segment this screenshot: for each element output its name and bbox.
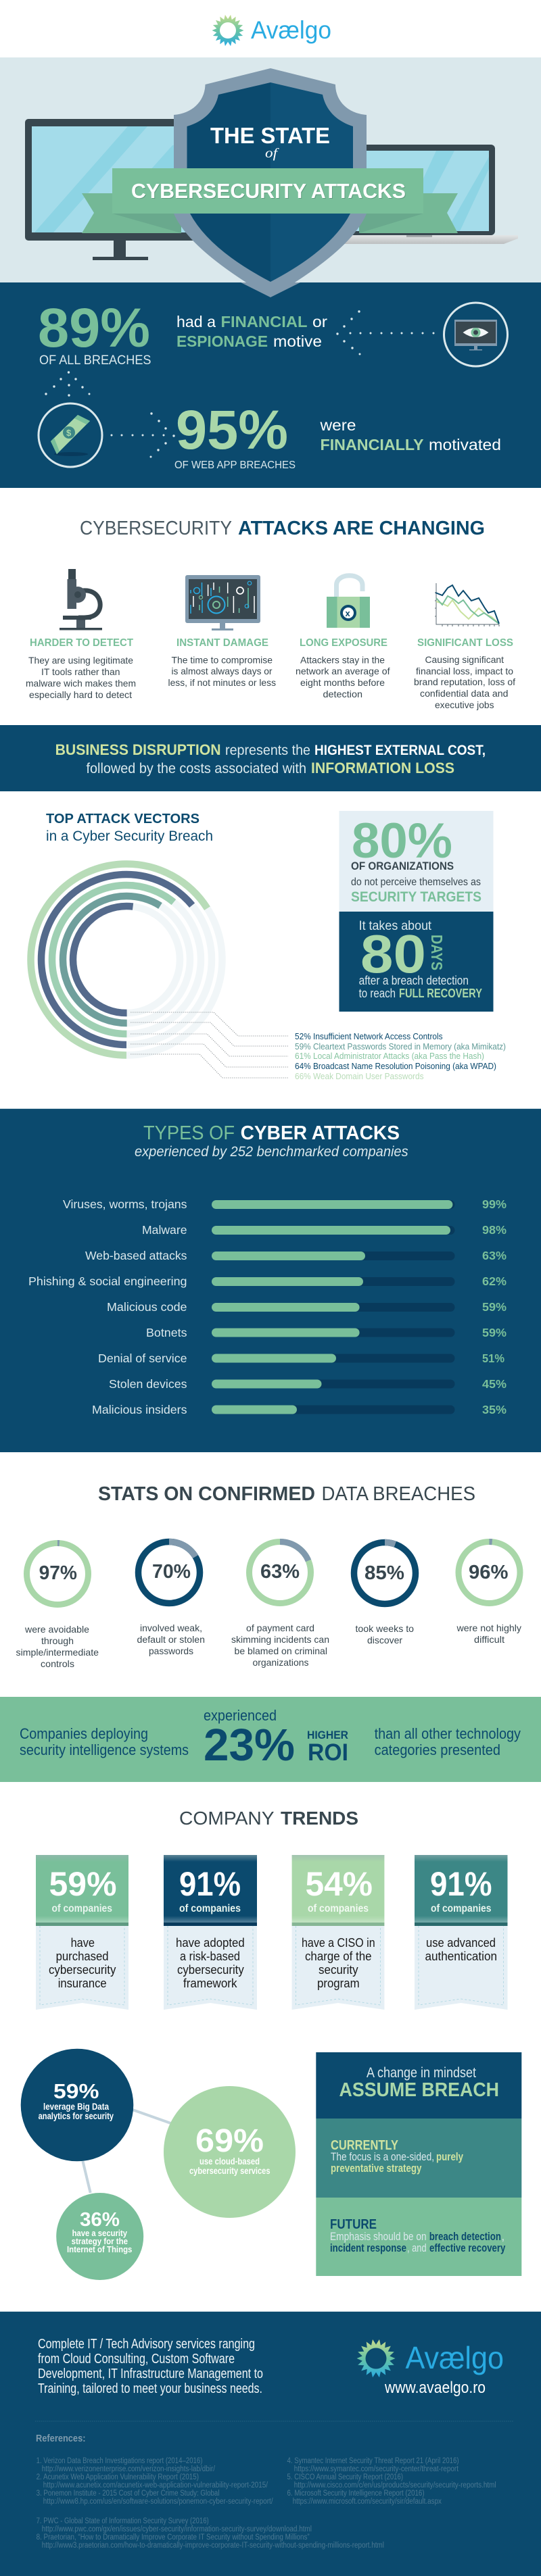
references list: https://www.microsoft.com/security/sir/default.aspx (293, 2498, 442, 2506)
text: financially motivated: motivated (429, 436, 501, 453)
legend: attack vectors: 64% Broadcast Name Resolution Poisoning (aka WPAD) (295, 1061, 496, 1071)
bar chart: attack types: Botnets (146, 1326, 187, 1339)
stat: 85 percent donut: 85% (364, 1562, 404, 1584)
ribbon: 91 percent framework: 91% (179, 1865, 241, 1903)
text: description: eight months before (300, 677, 385, 688)
ribbon: 91 percent framework: have adopted (176, 1936, 245, 1950)
stat: 96 percent donut: were not highly (456, 1623, 521, 1633)
text: description: financial loss, impact to (416, 666, 513, 676)
ribbon: 59 percent: cybersecurity (49, 1963, 116, 1977)
column: harder to detect: HARDER TO DETECT (30, 637, 133, 649)
bubble: 36 percent internet of things: Internet of Things (67, 2244, 132, 2254)
heading: company trends: COMPANY (179, 1808, 275, 1829)
references list: http://www3.praetorian.com/how-to-dramatically-improve-corporate-IT-security-without-spending-millions-report.html (42, 2542, 384, 2550)
references list: 4. Symantec Internet Security Threat Report 21 (April 2016) (287, 2457, 459, 2465)
panel: currently (316, 2119, 521, 2198)
stat: 97 percent donut: simple/intermediate (16, 1647, 99, 1658)
panel: 80 days recovery: DAYS (428, 935, 446, 970)
text: description: The time to compromise (172, 654, 273, 665)
stat: 63 percent donut: 63% (260, 1561, 300, 1583)
panel: hero (0, 57, 541, 297)
legend: attack vectors (295, 1031, 506, 1081)
panel: assume breach: A change in mindset (367, 2065, 476, 2081)
leader lines (131, 1012, 288, 1078)
banner: business disruption: BUSINESS DISRUPTION (55, 741, 221, 758)
stat: 63 percent donut (231, 1542, 329, 1668)
panel: assume breach: ASSUME BREACH (339, 2079, 499, 2101)
icon: money bill: $ (66, 428, 72, 438)
icon: monitor with data (185, 575, 260, 630)
column: significant loss: SIGNIFICANT LOSS (417, 637, 513, 649)
stat: 95 percent: 95% (176, 399, 288, 461)
panel: future: , and (407, 2242, 427, 2254)
panel: 80 days recovery: to reach (359, 987, 396, 1000)
ribbon: 91 percent framework: cybersecurity (177, 1963, 244, 1977)
bubble: 36 percent internet of things: have a security (72, 2228, 128, 2238)
icon: falling line chart (435, 583, 499, 626)
text: financial or espionage motive: had a (177, 313, 216, 330)
text: services blurb: Training, tailored to meet your business needs. (38, 2381, 262, 2396)
title: the state of (210, 123, 330, 161)
references list: http://www.verizonenterprise.com/verizon-insights-lab/dbir/ (42, 2465, 216, 2473)
references heading: References: (36, 2433, 85, 2444)
legend: attack vectors: 66% Weak Domain User Passwords (295, 1071, 424, 1081)
bubble: 69 percent cloud: use cloud-based (199, 2156, 260, 2166)
banner: 23 percent higher ROI: HIGHER (307, 1729, 348, 1741)
legend: attack vectors: 61% Local Administrator Attacks (aka Pass the Hash) (295, 1051, 484, 1061)
references list: 3. Ponemon Institute - 2015 Cost of Cyber Crime Study: Global (37, 2490, 219, 2498)
banner: 23 percent higher ROI: security intelligence systems (20, 1741, 189, 1758)
header logo (212, 15, 331, 46)
panel: assume breach (316, 2052, 521, 2276)
heading: types of cyber attacks (135, 1122, 408, 1160)
banner: business disruption: represents the (225, 743, 310, 758)
title: the state of: THE STATE (210, 123, 330, 148)
bubble: 69 percent cloud: cybersecurity services (189, 2165, 270, 2176)
icon: laptop (325, 145, 518, 244)
footer (0, 2311, 541, 2576)
stat: 70 percent donut: involved weak, (140, 1623, 202, 1633)
banner: 23 percent higher ROI: 23% (204, 1720, 295, 1770)
heading: top attack vectors: in a Cyber Security Breach (46, 828, 213, 844)
references list: 8. Praetorian, “How to Dramatically Improve Corporate IT Security without Spending Millions” (37, 2533, 310, 2542)
text: financially motivated: were (319, 416, 356, 434)
bar chart: attack types: Denial of service (98, 1352, 187, 1365)
panel: 80 days recovery: 80 (360, 924, 426, 984)
references list: 1. Verizon Data Breach Investigations report (2014–2016) (37, 2457, 203, 2465)
bar chart: attack types: Malware (142, 1223, 187, 1237)
ribbon: 54 percent: have a CISO in (302, 1936, 375, 1950)
panel: currently: The focus is a one-sided, (331, 2151, 434, 2163)
banner: 23 percent higher ROI: categories presented (375, 1741, 500, 1758)
column: long exposure (296, 576, 390, 699)
stat: 85 percent donut: discover (367, 1635, 402, 1645)
title ribbon: cybersecurity attacks: CYBERSECURITY ATTACKS (131, 179, 406, 203)
bar chart: attack types (28, 1197, 507, 1416)
stat: 63 percent donut: be blamed on criminal (234, 1645, 327, 1656)
stat: 70 percent donut: 70% (152, 1561, 191, 1583)
bar chart: attack types: 51% (482, 1352, 504, 1365)
panel: 80 days recovery: It takes about (359, 919, 432, 933)
ribbon: 54 percent: 54% (306, 1865, 373, 1903)
text: description: Attackers stay in the (300, 654, 385, 665)
text: financially motivated (319, 416, 501, 453)
chart: concentric attack vector rings (31, 864, 222, 1056)
bubble: 36 percent internet of things: strategy for the (72, 2236, 128, 2246)
column: harder to detect (26, 569, 136, 700)
ribbon: 54 percent: program (317, 1977, 360, 1990)
arrow: dotted to 95 percent (111, 412, 175, 458)
banner: 23 percent higher ROI: Companies deploying (20, 1725, 148, 1742)
panel: future (316, 2198, 521, 2276)
footer logo: www.avaelgo.ro (384, 2379, 486, 2397)
header logo: Avælgo (251, 16, 331, 44)
ribbon: 59 percent: insurance (58, 1977, 107, 1990)
stat: 97 percent donut: controls (41, 1658, 74, 1669)
panel: breach stats (0, 282, 541, 488)
column: instant damage: INSTANT DAMAGE (177, 637, 268, 649)
heading: top attack vectors (46, 812, 213, 844)
heading: top attack vectors: TOP ATTACK VECTORS (46, 812, 199, 826)
arrow: dotted upward to 89 percent (45, 371, 91, 397)
text: financially motivated: FINANCIALLY (321, 436, 423, 453)
panel: 80 percent of organizations: SECURITY TARGETS (351, 889, 481, 905)
references list: https://www.symantec.com/security-center/threat-report (294, 2465, 459, 2473)
panel: currently: CURRENTLY (331, 2138, 399, 2153)
heading: stats on confirmed data breaches (98, 1483, 475, 1505)
references list: 5. CISCO Annual Security Report (2016) (287, 2473, 403, 2481)
stat: 85 percent donut (354, 1542, 415, 1645)
text: description (414, 654, 515, 710)
title: the state of: of (265, 146, 279, 161)
icon: open padlock: x (345, 608, 350, 618)
panel: future: effective recovery (429, 2242, 506, 2254)
bar chart: attack types: Malicious insiders (92, 1403, 187, 1416)
heading: cybersecurity attacks are changing: CYBERSECURITY (80, 518, 232, 539)
icon: open padlock (327, 576, 370, 628)
panel: currently: preventative strategy (331, 2162, 422, 2175)
stat: 70 percent donut (137, 1542, 205, 1656)
text: description: especially hard to detect (29, 689, 132, 700)
ribbon tails (82, 193, 458, 233)
banner: 23 percent higher ROI: experienced (204, 1707, 277, 1724)
text: description: malware wich makes them (26, 678, 136, 689)
text: financial or espionage motive (177, 313, 327, 350)
stat: 96 percent donut: 96% (469, 1562, 509, 1583)
bar chart: attack types: 63% (482, 1249, 507, 1262)
icon: eye on monitor (444, 303, 507, 366)
bubble: 69 percent cloud: 69% (195, 2123, 264, 2159)
panel: 80 days recovery: FULL RECOVERY (399, 987, 482, 1000)
bar chart: attack types: 62% (482, 1274, 507, 1288)
panel: 80 percent of organizations (339, 811, 494, 912)
banner: business disruption: HIGHEST EXTERNAL COST, (314, 743, 486, 758)
references list: http://www8.hp.com/us/en/software-solutions/ponemon-cyber-security-report/ (43, 2498, 273, 2506)
panel: 80 percent of organizations: do not perceive themselves as (351, 876, 481, 888)
panel: 80 days recovery: after a breach detection (359, 974, 469, 987)
heading: company trends (179, 1808, 358, 1829)
ribbon: 91 percent authentication: of companies (431, 1903, 492, 1914)
bubble: 59 percent big data: 59% (53, 2079, 99, 2103)
ribbon: 91 percent authentication: authentication (425, 1950, 497, 1963)
references list: 6. Microsoft Security Intelligence Report (2016) (287, 2490, 425, 2498)
references list (37, 2457, 496, 2550)
bar chart: attack types: 98% (482, 1223, 507, 1237)
heading: types of cyber attacks: experienced by 252 benchmarked companies (135, 1144, 408, 1160)
ribbon: 91 percent authentication (415, 1855, 507, 2010)
text: description: network an average of (296, 666, 390, 676)
bar chart: attack types: 35% (482, 1403, 507, 1416)
stat: 70 percent donut: default or stolen (137, 1634, 205, 1645)
text: description: They are using legitimate (28, 655, 133, 666)
panel: future: incident response (330, 2242, 406, 2254)
stat: 89 percent: 89% (38, 297, 150, 359)
references list: http://www.pwc.com/gx/en/issues/cyber-security/information-security-survey/download.html (42, 2525, 312, 2533)
stat: 96 percent donut: difficult (474, 1634, 504, 1645)
bar chart: attack types: Web-based attacks (85, 1249, 187, 1262)
banner: business disruption: followed by the costs associated with (87, 761, 306, 776)
footer logo: Avælgo (406, 2340, 504, 2375)
panel: types of cyber attacks (0, 1108, 541, 1452)
icon: microscope (60, 569, 102, 630)
bubble: 69 percent cloud (164, 2086, 296, 2218)
column: significant loss (414, 583, 515, 710)
panel: future: Emphasis should be on (330, 2231, 427, 2243)
panel: 80 percent of organizations: 80% (352, 814, 452, 868)
bar chart: attack types: Malicious code (107, 1300, 187, 1314)
text: description (26, 655, 136, 700)
text: financial or espionage motive: or (312, 313, 327, 330)
stat: 70 percent donut: passwords (149, 1645, 193, 1656)
ribbon: 54 percent: of companies (308, 1903, 369, 1914)
ribbon: 91 percent framework (164, 1855, 257, 2010)
text: description: less, if not minutes or less (168, 677, 276, 688)
text: services blurb: Development, IT Infrastructure Management to (38, 2367, 263, 2381)
ribbon: 59 percent (36, 1855, 128, 2010)
column: instant damage (168, 575, 276, 688)
banner: 23 percent higher ROI: than all other technology (375, 1725, 521, 1742)
text: services blurb (38, 2337, 263, 2396)
bar chart: attack types: Stolen devices (109, 1377, 187, 1391)
stat: 63 percent donut: organizations (253, 1657, 308, 1668)
panel: currently: purely (436, 2151, 464, 2163)
stat: 97 percent donut: were avoidable (24, 1624, 89, 1635)
heading: stats on confirmed data breaches: STATS ON CONFIRMED (98, 1483, 315, 1505)
text: description: confidential data and (420, 688, 509, 699)
banner: 23 percent higher ROI (0, 1697, 541, 1782)
banner: 23 percent higher ROI: ROI (308, 1739, 348, 1766)
column: long exposure: LONG EXPOSURE (300, 637, 387, 649)
banner: business disruption: INFORMATION LOSS (311, 760, 454, 776)
heading: company trends: TRENDS (281, 1808, 358, 1829)
ribbon: 59 percent: purchased (56, 1950, 109, 1963)
icon: shield (174, 68, 367, 297)
text: description: executive jobs (435, 699, 494, 710)
ribbon: 54 percent (292, 1855, 384, 2010)
bar chart: attack types: 99% (482, 1197, 507, 1211)
bar chart: attack types: 45% (482, 1377, 507, 1391)
bubble: 36 percent internet of things: 36% (80, 2209, 120, 2231)
heading: cybersecurity attacks are changing: ATTACKS ARE CHANGING (238, 518, 485, 539)
references list: http://www.cisco.com/c/en/us/products/security/security-reports.html (294, 2481, 496, 2490)
connectors between bubbles (83, 2110, 171, 2193)
text: services blurb: from Cloud Consulting, Custom Software (38, 2352, 235, 2367)
stat: 97 percent donut: through (41, 1635, 74, 1646)
stat: 63 percent donut: of payment card (246, 1623, 314, 1633)
ribbon: 59 percent: of companies (51, 1903, 112, 1914)
bubble: 59 percent big data: analytics for security (39, 2110, 114, 2121)
text: description: Causing significant (425, 654, 504, 665)
ribbon: 91 percent authentication: use advanced (426, 1936, 496, 1950)
text: description: is almost always days or (172, 666, 273, 676)
references list: http://www.acunetix.com/acunetix-web-application-vulnerability-report-2015/ (43, 2481, 268, 2490)
banner: business disruption (0, 725, 541, 791)
bar chart: attack types: 59% (482, 1300, 507, 1314)
ribbon: 91 percent framework: a risk-based (180, 1950, 240, 1963)
ribbon: 91 percent framework: of companies (179, 1903, 241, 1914)
icon: desktop monitor (25, 119, 221, 260)
heading: types of cyber attacks: CYBER ATTACKS (241, 1122, 400, 1144)
bubble: 59 percent big data: leverage Big Data (43, 2101, 109, 2112)
arrow: dotted from eye monitor (336, 310, 434, 355)
panel: future: , (502, 2231, 504, 2243)
bar chart: attack types: 59% (482, 1326, 507, 1339)
text: financial or espionage motive: FINANCIAL (220, 313, 307, 330)
stat: 95 percent: OF WEB APP BREACHES (174, 460, 296, 471)
text: description (168, 654, 276, 688)
panel: future: FUTURE (330, 2217, 377, 2232)
references list: 7. PWC - Global State of Information Security Survey (2016) (37, 2517, 209, 2525)
panel: 80 percent of organizations: OF ORGANIZATIONS (351, 860, 454, 872)
bar chart: attack types: Viruses, worms, trojans (63, 1197, 187, 1211)
ribbon: 54 percent: security (319, 1963, 358, 1977)
text: description: detection (323, 689, 362, 699)
text: description (296, 654, 390, 699)
shield tip (241, 282, 300, 297)
ribbon: 91 percent framework: framework (183, 1977, 237, 1990)
text: description: IT tools rather than (41, 666, 120, 677)
stat: 97 percent donut (16, 1543, 99, 1669)
text: services blurb: Complete IT / Tech Advisory services ranging (38, 2337, 255, 2352)
stat: 97 percent donut: 97% (39, 1562, 77, 1584)
stat: 63 percent donut: skimming incidents can (231, 1634, 329, 1645)
footer logo (357, 2339, 504, 2397)
ribbon: 59 percent: have (71, 1936, 95, 1950)
ribbon: 91 percent authentication: 91% (430, 1865, 492, 1903)
legend: attack vectors: 52% Insufficient Network Access Controls (295, 1031, 443, 1041)
stat: 89 percent: OF ALL BREACHES (39, 353, 151, 368)
stat: 96 percent donut (456, 1542, 521, 1645)
bubble: 36 percent internet of things (56, 2193, 143, 2280)
title ribbon: cybersecurity attacks (112, 168, 423, 214)
bubble: 59 percent big data (21, 2049, 133, 2161)
heading: types of cyber attacks: TYPES OF (143, 1122, 235, 1144)
text: description: brand reputation, loss of (414, 676, 515, 687)
bar chart: attack types: Phishing & social engineering (28, 1274, 187, 1288)
ribbon: 59 percent: 59% (49, 1865, 116, 1903)
heading: cybersecurity attacks are changing (80, 518, 485, 539)
legend: attack vectors: 59% Cleartext Passwords Stored in Memory (aka Mimikatz) (295, 1041, 506, 1051)
panel: future: breach detection (429, 2231, 501, 2243)
stat: 85 percent donut: took weeks to (356, 1623, 414, 1634)
ribbon: 54 percent: charge of the (305, 1950, 372, 1963)
text: financial or espionage motive: ESPIONAGE (177, 332, 268, 350)
text: financial or espionage motive: motive (273, 332, 322, 350)
panel: 80 days recovery (339, 912, 494, 1012)
icon: money bill (39, 403, 102, 467)
heading: stats on confirmed data breaches: DATA BREACHES (322, 1483, 475, 1505)
references list: 2. Acunetix Web Application Vulnerability Report (2015) (37, 2473, 199, 2481)
